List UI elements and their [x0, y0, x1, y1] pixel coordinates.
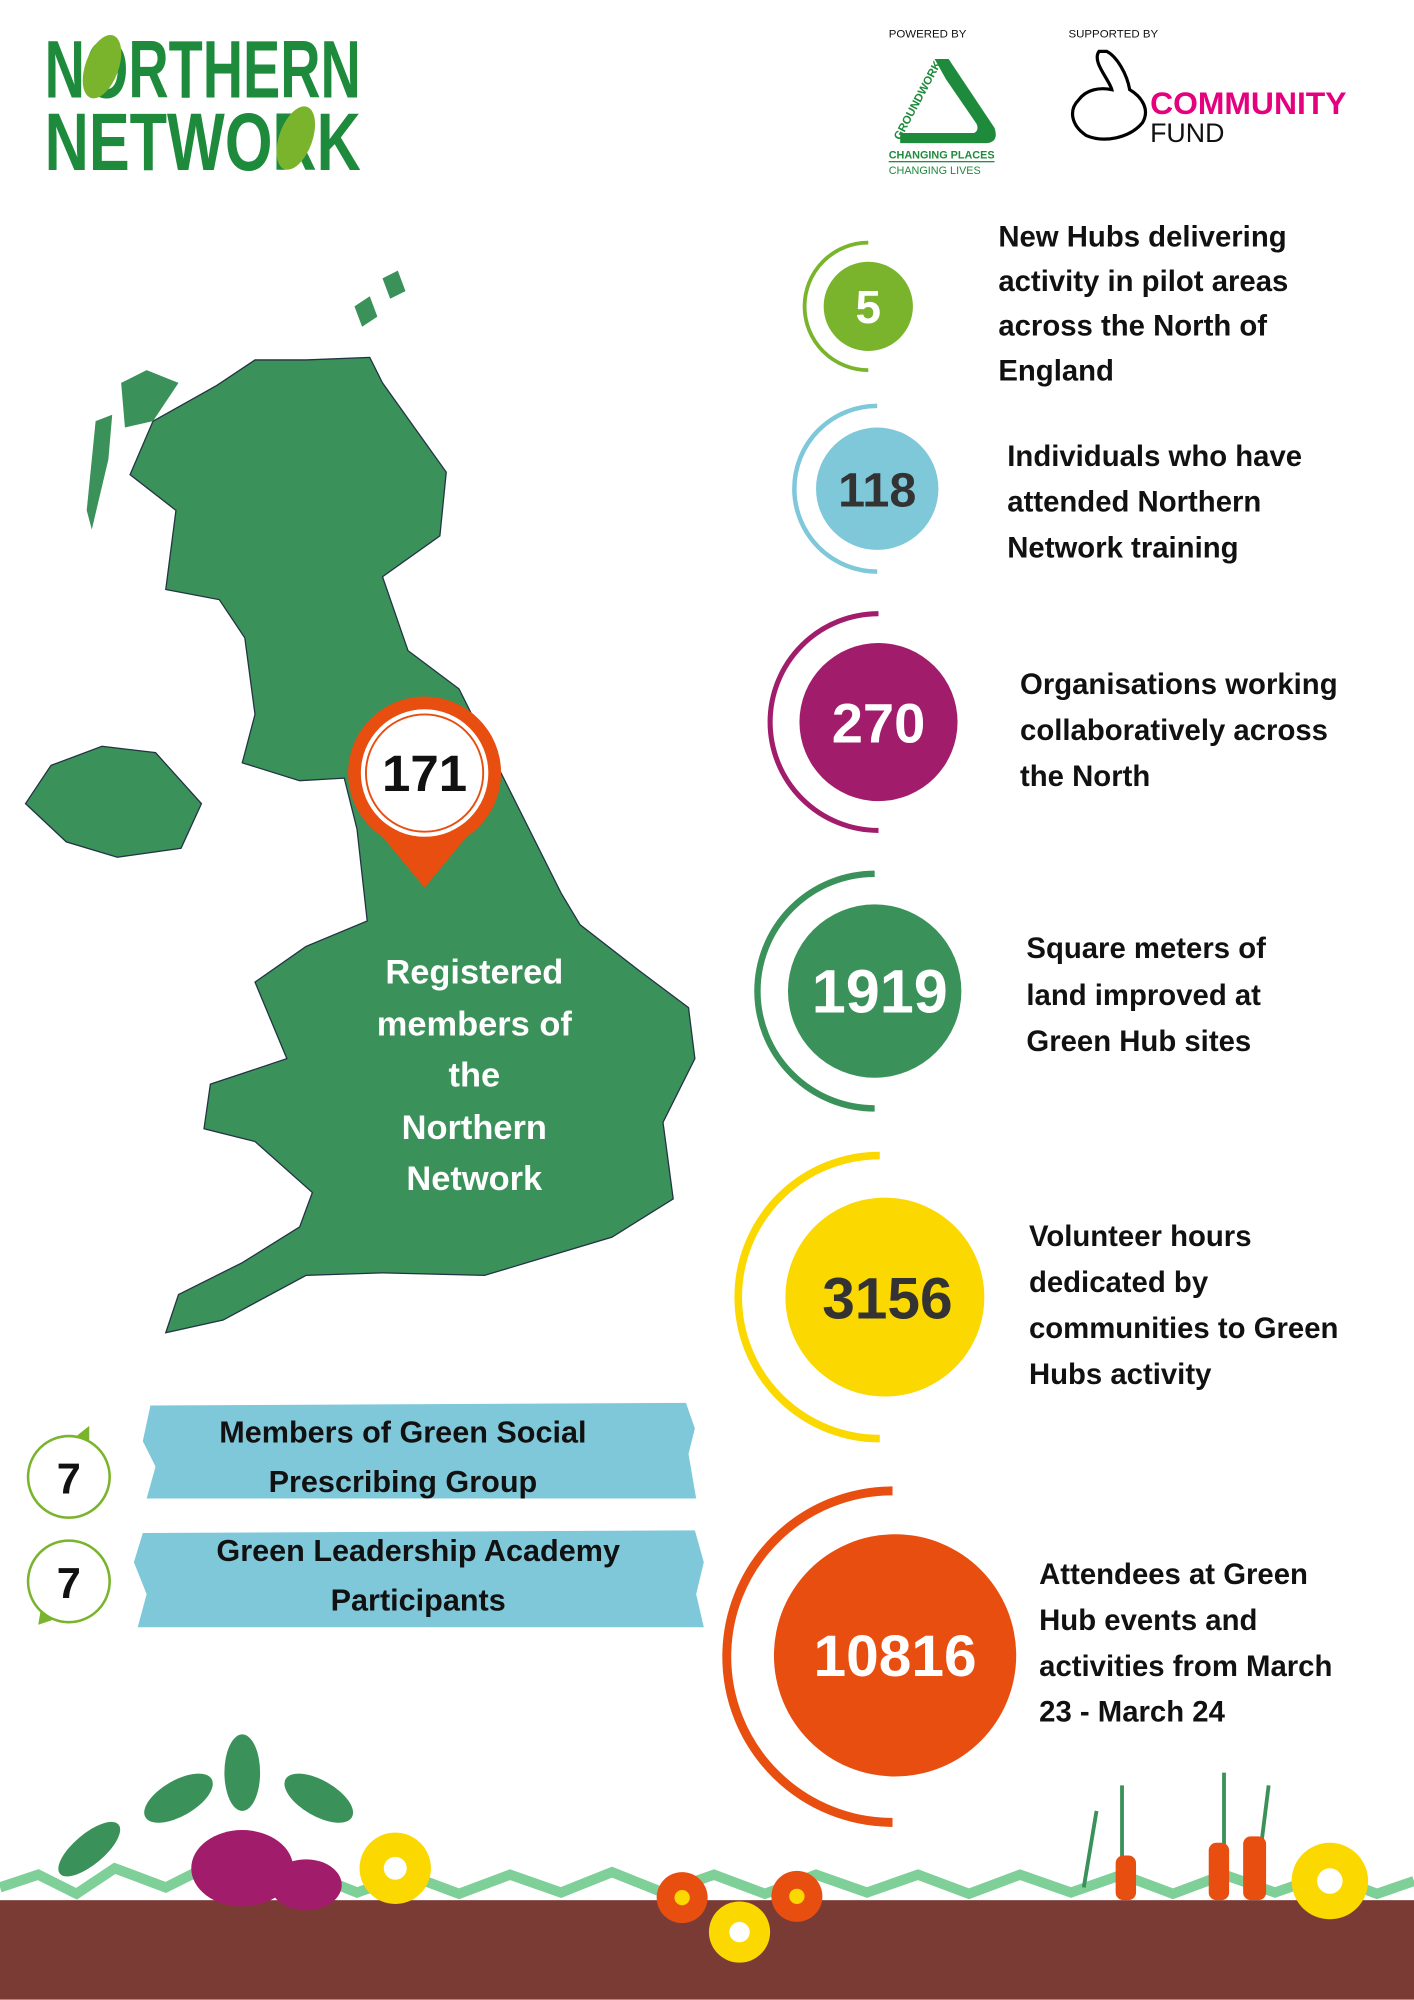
stat: 3156 volunteer hours: dedicated by — [1029, 1266, 1209, 1299]
logo: Northern Network: NETWORK — [45, 97, 361, 188]
badge: 7 leadership — [28, 1541, 110, 1625]
logo: Groundwork powered by: GROUNDWORK — [892, 59, 944, 142]
logo: Groundwork powered by: CHANGING PLACES — [889, 149, 995, 161]
stat: 1919 square meters: Square meters of — [1026, 932, 1266, 965]
stat: 3156 volunteer hours: Hubs activity — [1029, 1358, 1212, 1391]
stat: 1919 square meters: Green Hub sites — [1026, 1025, 1251, 1058]
stat: 10816 attendees — [727, 1491, 1332, 1822]
map text: registered members: Northern — [402, 1109, 547, 1147]
map: UK — [26, 271, 695, 1333]
map pin: 171: 171 — [382, 745, 467, 802]
badge: 7 leadership: 7 — [57, 1560, 81, 1608]
map text: registered members: members of — [377, 1006, 572, 1044]
illustration: garden ground with plants — [0, 1734, 1414, 2000]
banner: green social prescribing: Members of Green Social — [219, 1415, 587, 1449]
stat: 3156 volunteer hours: 3156 — [822, 1267, 953, 1332]
banner: green social prescribing — [143, 1403, 696, 1499]
stat: 118 individuals: Individuals who have — [1007, 440, 1302, 473]
stat: 5 new hubs: activity in pilot areas — [998, 265, 1288, 298]
stat: 5 new hubs: New Hubs delivering — [998, 220, 1287, 253]
logo: Groundwork powered by — [889, 28, 996, 177]
logo: Northern Network: NORTHERN — [45, 24, 361, 115]
stat: 5 new hubs: across the North of — [998, 310, 1267, 343]
logo: Groundwork powered by: CHANGING LIVES — [889, 165, 981, 177]
badge: 7 green social — [28, 1426, 110, 1518]
stat: 10816 attendees: 23 - March 24 — [1039, 1696, 1226, 1729]
logo: Community Fund: FUND — [1150, 118, 1224, 148]
stat: 270 organisations: collaboratively across — [1020, 714, 1328, 747]
stat: 10816 attendees: activities from March — [1039, 1650, 1332, 1683]
banner: green leadership academy: Participants — [331, 1584, 506, 1618]
logo: Community Fund — [1068, 28, 1347, 148]
banner: green leadership academy — [134, 1530, 704, 1627]
stat: 1919 square meters: 1919 — [812, 958, 948, 1026]
stat: 5 new hubs: 5 — [856, 281, 881, 333]
banner: green social prescribing: Prescribing Group — [269, 1465, 537, 1499]
map text: registered members: the — [449, 1057, 500, 1095]
map text: registered members — [377, 953, 572, 1198]
stat: 270 organisations: 270 — [832, 691, 925, 754]
stat: 118 individuals: Network training — [1007, 532, 1239, 565]
stat: 5 new hubs: England — [998, 354, 1114, 387]
logo: Community Fund: SUPPORTED BY — [1068, 28, 1158, 40]
stat: 3156 volunteer hours: Volunteer hours — [1029, 1220, 1252, 1253]
stat: 270 organisations: the North — [1020, 760, 1150, 793]
stat: 10816 attendees: Hub events and — [1039, 1604, 1257, 1637]
stat: 118 individuals: 118 — [838, 464, 916, 518]
stat: 3156 volunteer hours — [738, 1156, 1338, 1439]
stat: 3156 volunteer hours: communities to Green — [1029, 1312, 1338, 1345]
stat: 118 individuals — [794, 406, 1302, 572]
logo: Northern Network — [45, 24, 361, 188]
banner: green leadership academy: Green Leadership Academy — [216, 1534, 620, 1568]
stat: 10816 attendees: 10816 — [814, 1624, 977, 1689]
badge: 7 green social: 7 — [57, 1455, 81, 1503]
stat: 270 organisations: Organisations working — [1020, 668, 1338, 701]
map text: registered members: Network — [406, 1160, 543, 1198]
logo: Groundwork powered by: POWERED BY — [889, 28, 967, 40]
stat: 118 individuals: attended Northern — [1007, 486, 1261, 519]
stat: 1919 square meters — [757, 874, 1266, 1108]
logo: Community Fund: COMMUNITY — [1150, 85, 1347, 121]
stat: 5 new hubs — [805, 220, 1288, 387]
map text: registered members: Registered — [385, 953, 563, 991]
stat: 10816 attendees: Attendees at Green — [1039, 1558, 1308, 1591]
stat: 270 organisations — [770, 614, 1338, 830]
map pin: 171 — [348, 697, 501, 888]
stat: 1919 square meters: land improved at — [1026, 979, 1261, 1012]
